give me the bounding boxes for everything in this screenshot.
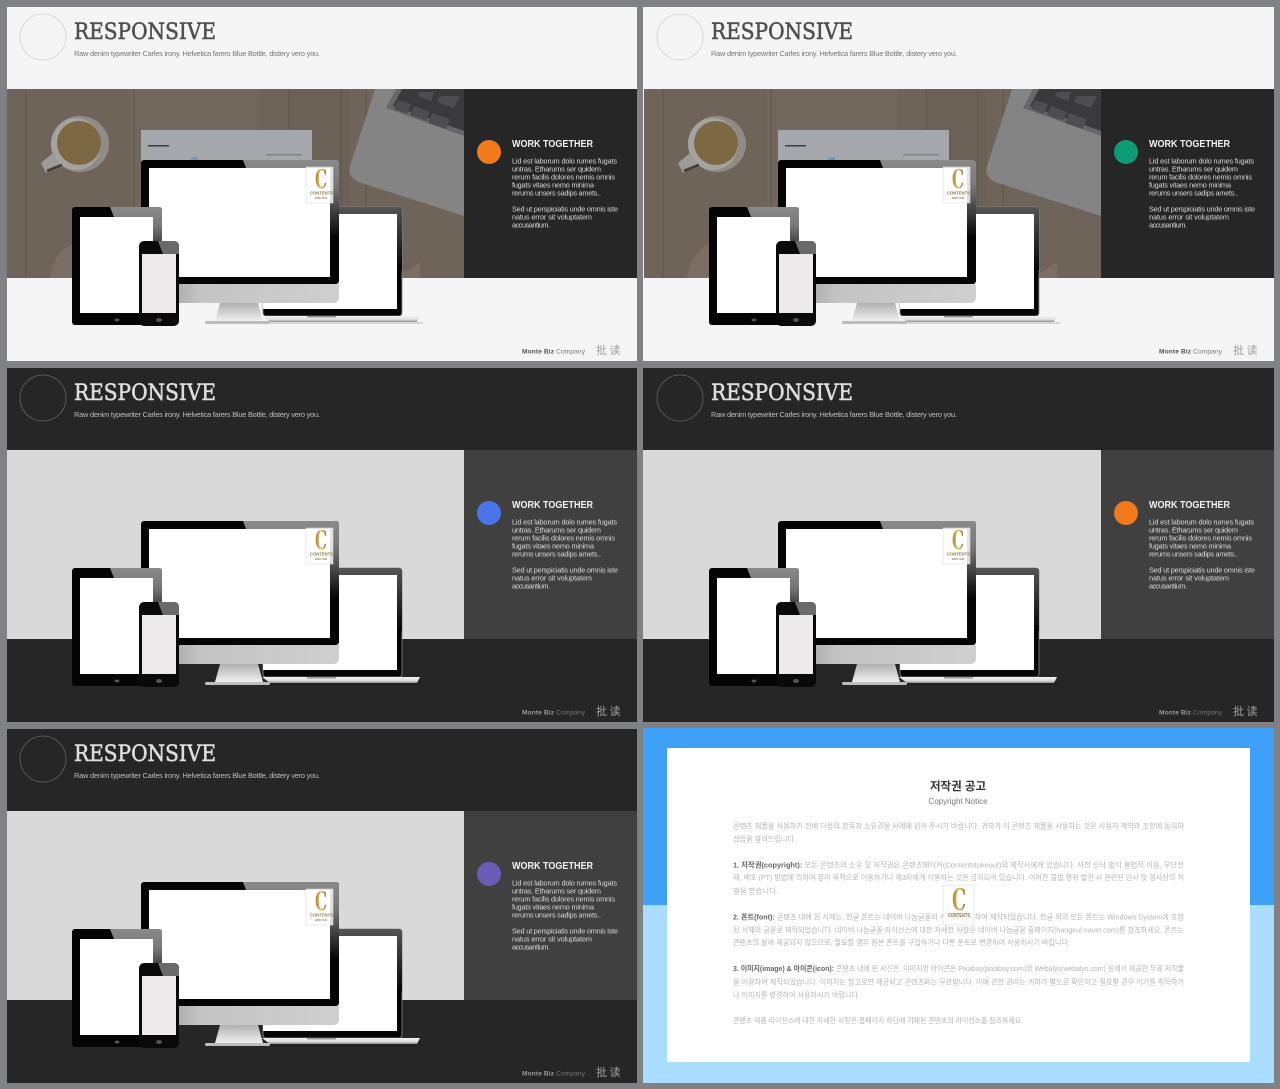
side text: rerums unsers sadips amets.. xyxy=(512,550,601,558)
side text: untras. Etharums ser quidem xyxy=(512,526,601,534)
section 2: font xyxy=(733,912,1184,947)
footer company name: Monte Biz Company xyxy=(522,348,586,356)
closing line: 콘텐츠 제품 라이선스에 대한 자세한 사항은 홈페이지 하단에 기재된 콘텐츠의 라이선스를 참조하세요. xyxy=(733,1016,1023,1025)
side heading: WORK TOGETHER xyxy=(512,139,594,150)
side text: rerum facilis dolores nemis omnis xyxy=(1149,534,1252,542)
grey band xyxy=(7,450,464,639)
header icon circle xyxy=(20,14,66,60)
side text: Lid est laborum dolo rumes fugats xyxy=(512,878,617,888)
side text: fugats vitaes nemo minima xyxy=(1149,542,1232,550)
side text xyxy=(512,518,618,590)
watermark logo: CONTENTS xyxy=(948,913,971,919)
side text xyxy=(512,156,618,230)
footer logo characters: 批 读 xyxy=(596,703,620,719)
device mockups xyxy=(72,882,423,1048)
section 2: font: 콘텐츠의 활에 제공되지 않으므로, 필요할 경우 원본 폰트를 구입하거나 다른 폰트로 변경하여 사용하시기 바랍니다. xyxy=(733,938,1070,947)
side panel: grey background xyxy=(464,811,637,1000)
grey band xyxy=(7,811,464,1000)
section 3: image and icon: 을 이용하여 제작되었습니다. 이미지는 참고로만 제공되고 콘텐츠와는 무관합니다. 이에 관한 권리는 귀하가 별도로 확인하고 필요할 경우 이거를 취득하거 xyxy=(733,978,1184,986)
notice subtitle: Copyright Notice xyxy=(928,797,988,806)
side text: untras. Etharums ser quidem xyxy=(512,886,601,896)
panel: dark slide with purple marker xyxy=(7,729,637,1083)
side text: rerums unsers sadips amets.. xyxy=(1149,550,1238,558)
section 1: copyright: 1. 저작권(copyright): 모든 콘텐츠의 소유 및 저작권은 콘텐츠메이커(Contentstokeout)의 제작사에게 있습니다. 사전 승낙 없이 불법적 이용, 무단전 xyxy=(733,860,1184,870)
header icon circle xyxy=(657,14,703,60)
title: RESPONSIVE xyxy=(74,381,216,406)
device mockups xyxy=(709,160,1060,326)
side text: accusantium. xyxy=(512,220,550,230)
side text: Sed ut perspiciatis unde omnis iste xyxy=(512,204,618,214)
side text: rerums unsers sadips amets.. xyxy=(512,188,601,198)
subtitle: Raw denim typewriter Carles irony. Helvetica farers Blue Bottle, distery vero you. xyxy=(711,49,957,58)
side text: Lid est laborum dolo rumes fugats xyxy=(512,518,617,526)
notice title: 저작권 공고 xyxy=(930,779,986,793)
side text: accusantium. xyxy=(1149,220,1187,230)
section 2: font: 된 서체의 글꼴로 제작되었습니다. 네이버 나눔글꼴 라이선스에 대한 자세한 사항은 네이버 나눔글꼴 홈페이지(hangeul.naver.com)를 참조하세요. 폰트는 xyxy=(733,926,1184,934)
footer company name: Monte Biz Company xyxy=(1159,710,1223,716)
side text: rerum facilis dolores nemis omnis xyxy=(1149,172,1252,182)
header icon circle xyxy=(20,375,66,421)
header icon circle xyxy=(20,736,66,782)
panel: dark slide with orange marker xyxy=(643,368,1274,722)
side panel: dark background xyxy=(464,89,637,278)
device mockups xyxy=(72,160,423,326)
icon: purple circle xyxy=(477,862,501,886)
icon: green circle xyxy=(1114,140,1138,164)
side text xyxy=(1149,518,1255,590)
side text: Lid est laborum dolo rumes fugats xyxy=(512,156,617,166)
side text: Lid est laborum dolo rumes fugats xyxy=(1149,518,1254,526)
section 3: image and icon: 나 이미지를 변경하여 사용하시기 바랍니다. xyxy=(733,990,860,1000)
side text: untras. Etharums ser quidem xyxy=(512,164,601,174)
footer logo characters: 批 读 xyxy=(1233,342,1257,358)
watermark logo: C xyxy=(952,883,966,918)
photo band: desk with cup and laptop xyxy=(7,89,464,278)
side text: rerum facilis dolores nemis omnis xyxy=(512,172,615,182)
title: RESPONSIVE xyxy=(74,742,216,767)
footer company name: Monte Biz Company xyxy=(1159,348,1223,356)
side text: rerum facilis dolores nemis omnis xyxy=(512,894,615,904)
intro paragraph xyxy=(733,822,1184,844)
footer logo characters: 批 读 xyxy=(596,1064,620,1080)
section 3: image and icon: 3. 이미지(image) & 아이콘(icon): 콘텐츠 내에 된 사진은, 이미지와 아이콘은 Pixabay(pixabay.com)와 Webalys(webalys.com) 등에서 제공한 무료 저작물 xyxy=(733,964,1184,973)
section 1: copyright: 벌을 받습니다. xyxy=(733,886,778,896)
icon: orange circle xyxy=(1114,501,1138,525)
side panel: grey background xyxy=(464,450,637,639)
panel: light slide with orange marker xyxy=(7,7,637,361)
header icon circle xyxy=(657,375,703,421)
title: RESPONSIVE xyxy=(711,381,853,406)
side text: natus error sit voluptatem xyxy=(1149,212,1229,222)
title: RESPONSIVE xyxy=(711,20,853,45)
side text: rerum facilis dolores nemis omnis xyxy=(512,534,615,542)
side text: fugats vitaes nemo minima xyxy=(1149,180,1232,190)
side heading: WORK TOGETHER xyxy=(512,861,594,872)
side text: fugats vitaes nemo minima xyxy=(512,542,595,550)
footer company name: Monte Biz Company xyxy=(522,1070,586,1078)
section 2: font: 2. 폰트(font): 콘텐츠 내에 된 서체는, 한글 폰트는 네이버 나눔글꼴의 서체를 이용하여 제작되었습니다. 한글 외의 모든 폰트는 Windows System에 포함 xyxy=(733,912,1184,922)
watermark logo xyxy=(943,883,974,925)
side text xyxy=(512,878,618,952)
side text xyxy=(1149,156,1255,230)
side text: Sed ut perspiciatis unde omnis iste xyxy=(1149,566,1255,574)
side text: Sed ut perspiciatis unde omnis iste xyxy=(512,566,618,574)
side text: accusantium. xyxy=(512,942,550,952)
footer logo characters: 批 读 xyxy=(596,342,620,358)
intro paragraph: 콘텐츠 제품을 사용하기 전에 다음의 항목과 소유권을 사례에 읽어 주시기 바랍니다. 귀하가 이 콘텐츠 제품을 사용하는 것은 사용자 계약과 조항에 동의하 xyxy=(733,822,1184,830)
grey band xyxy=(643,450,1101,639)
side heading: WORK TOGETHER xyxy=(512,500,594,511)
side text: natus error sit voluptatem xyxy=(512,574,592,582)
side text: fugats vitaes nemo minima xyxy=(512,902,595,912)
subtitle: Raw denim typewriter Carles irony. Helvetica farers Blue Bottle, distery vero you. xyxy=(711,410,957,419)
side text: natus error sit voluptatem xyxy=(1149,574,1229,582)
device mockups xyxy=(72,521,423,687)
side panel: dark background xyxy=(1101,89,1274,278)
title: RESPONSIVE xyxy=(74,20,216,45)
side heading: WORK TOGETHER xyxy=(1149,139,1231,150)
side text: natus error sit voluptatem xyxy=(512,934,592,944)
subtitle: Raw denim typewriter Carles irony. Helvetica farers Blue Bottle, distery vero you. xyxy=(74,771,320,780)
panel: copyright notice xyxy=(643,728,1274,1083)
device mockups xyxy=(709,521,1060,687)
side text: untras. Etharums ser quidem xyxy=(1149,164,1238,174)
side text: Lid est laborum dolo rumes fugats xyxy=(1149,156,1254,166)
intro paragraph: 셨음을 알려드립니다. xyxy=(733,834,796,844)
panel: light slide with green marker xyxy=(643,7,1274,361)
section 1: copyright xyxy=(733,860,1184,896)
section 1: copyright: 재, 배포 (PT) 방법에 의하여 영리 목적으로 이용하거나 제3자에게 이용하는 것은 금지되어 있습니다. 이러한 불법 행위 발견 시 관련된 민사 및 형사상의 처 xyxy=(733,873,1184,882)
side text: Sed ut perspiciatis unde omnis iste xyxy=(512,926,618,936)
subtitle: Raw denim typewriter Carles irony. Helvetica farers Blue Bottle, distery vero you. xyxy=(74,49,320,58)
icon: orange circle xyxy=(477,140,501,164)
side panel: grey background xyxy=(1101,450,1274,639)
footer logo characters: 批 读 xyxy=(1233,703,1257,719)
side text: fugats vitaes nemo minima xyxy=(512,180,595,190)
footer company name: Monte Biz Company xyxy=(522,710,586,716)
side text: rerums unsers sadips amets.. xyxy=(1149,188,1238,198)
side text: untras. Etharums ser quidem xyxy=(1149,526,1238,534)
side text: accusantium. xyxy=(1149,582,1187,590)
photo band: desk with cup and laptop xyxy=(644,89,1101,278)
section 3: image and icon xyxy=(733,964,1184,1000)
side text: Sed ut perspiciatis unde omnis iste xyxy=(1149,204,1255,214)
panel: dark slide with blue marker xyxy=(7,368,637,722)
side text: accusantium. xyxy=(512,582,550,590)
subtitle: Raw denim typewriter Carles irony. Helvetica farers Blue Bottle, distery vero you. xyxy=(74,410,320,419)
side heading: WORK TOGETHER xyxy=(1149,500,1231,511)
side text: rerums unsers sadips amets.. xyxy=(512,910,601,920)
side text: natus error sit voluptatem xyxy=(512,212,592,222)
icon: blue circle xyxy=(477,501,501,525)
notice sheet xyxy=(667,748,1250,1062)
